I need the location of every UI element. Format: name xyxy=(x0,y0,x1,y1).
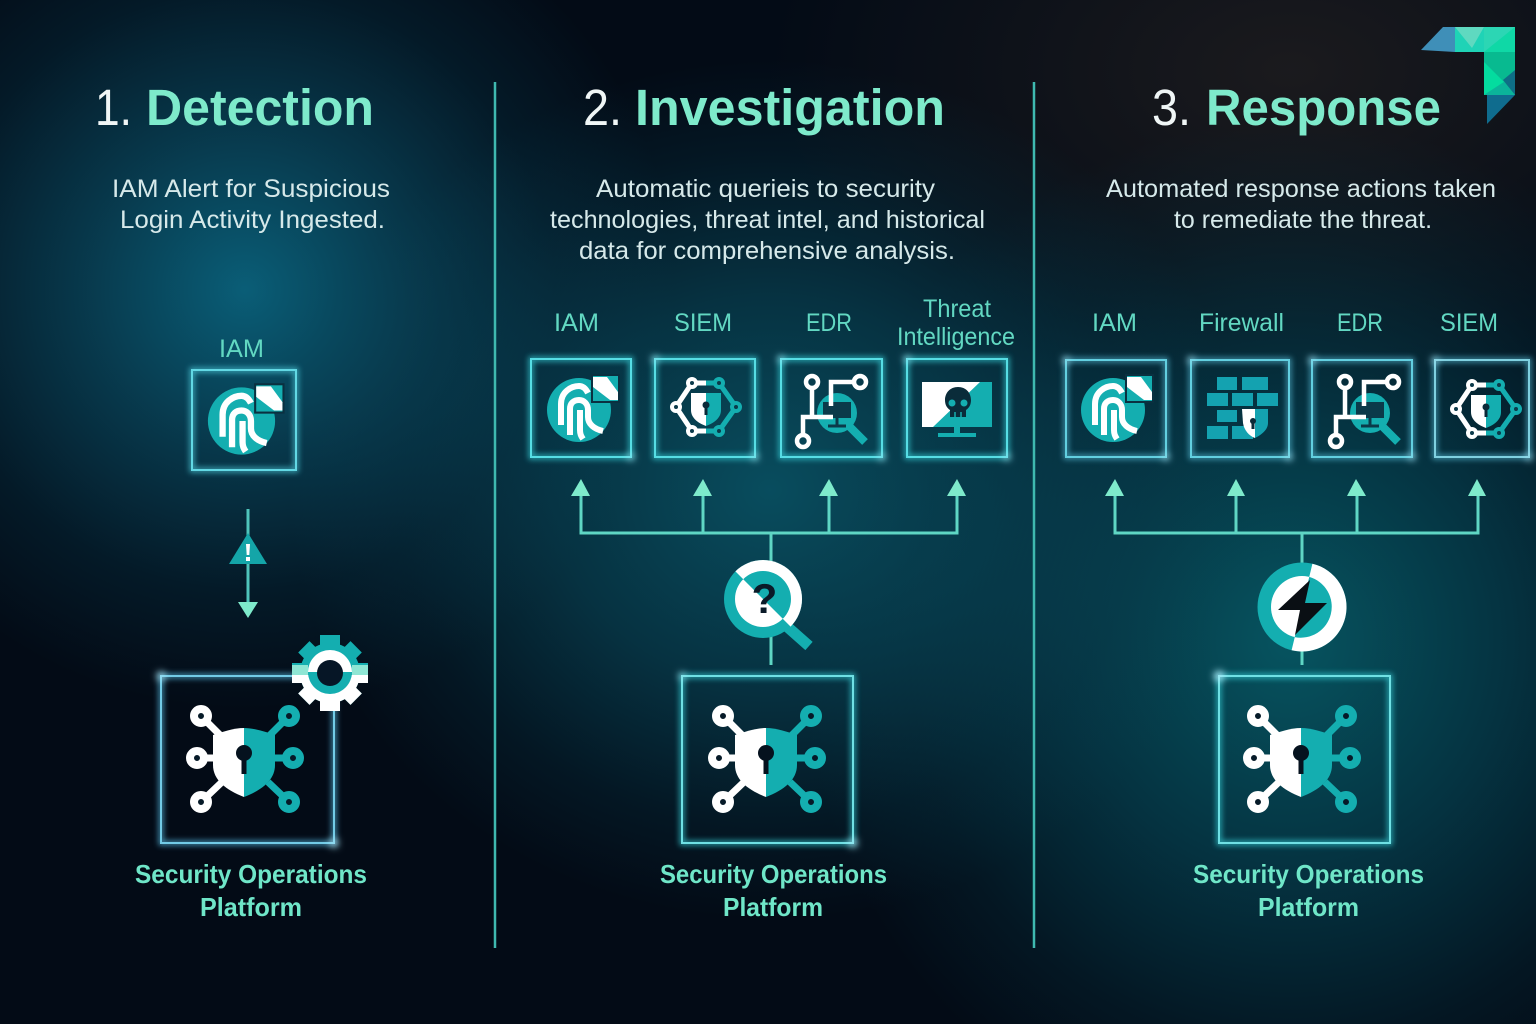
text block: detection description xyxy=(112,175,390,234)
icon box: security operations platform xyxy=(679,673,857,847)
icon box: SIEM xyxy=(652,356,758,460)
text block: investigation description: data for comprehensive analysis. xyxy=(579,237,955,265)
panel: detection xyxy=(95,79,390,922)
label: security operations platform: Security Operations xyxy=(1193,859,1424,889)
icon box: security operations platform xyxy=(157,672,338,847)
divider: detection and investigation xyxy=(494,82,496,948)
labels: response tools xyxy=(1092,309,1498,337)
heading: 3. Response: 3. xyxy=(1152,79,1191,136)
text block: response description: to remediate the threat. xyxy=(1174,206,1432,234)
label: security operations platform: Platform xyxy=(200,892,302,922)
icon: gear xyxy=(292,635,368,711)
labels: response tools: IAM xyxy=(1092,309,1137,337)
text block: investigation description xyxy=(550,175,985,265)
icon box: IAM xyxy=(531,359,634,460)
labels: response tools: Firewall xyxy=(1199,309,1284,337)
text block: detection description: IAM Alert for Suspicious xyxy=(112,175,390,203)
labels: investigation tools: Intelligence xyxy=(897,323,1015,351)
arrow: alert flowing down to platform xyxy=(229,509,267,618)
heading: 1. Detection: Detection xyxy=(146,79,374,136)
arrows: branching to tools xyxy=(571,479,966,665)
labels: investigation tools: SIEM xyxy=(674,309,732,337)
label: security operations platform: Platform xyxy=(723,892,823,922)
arrows: branching to tools xyxy=(1105,479,1486,665)
text block: response description xyxy=(1106,175,1496,234)
labels: investigation tools: EDR xyxy=(806,309,852,337)
logo xyxy=(1421,27,1515,124)
text block: response description: Automated response actions taken xyxy=(1106,175,1496,203)
labels: investigation tools: Threat xyxy=(923,295,991,323)
icon box: SIEM xyxy=(1432,357,1532,460)
text block: investigation description: Automatic querieis to security xyxy=(596,175,936,203)
labels: response tools: SIEM xyxy=(1440,309,1498,337)
icon box: IAM fingerprint xyxy=(192,370,296,470)
label: security operations platform xyxy=(135,859,367,922)
icon box: IAM xyxy=(1063,357,1169,460)
heading: 2. Investigation: 2. xyxy=(583,79,622,136)
panel: response xyxy=(1063,79,1532,922)
icon: lightning bolt xyxy=(1258,562,1347,652)
labels: investigation tools xyxy=(554,295,1015,351)
heading: 3. Response: Response xyxy=(1206,79,1441,136)
text block: detection description: Login Activity Ingested. xyxy=(120,206,385,234)
label: security operations platform xyxy=(1193,859,1424,922)
heading: 1. Detection: 1. xyxy=(95,79,132,136)
divider: investigation and response xyxy=(1033,82,1035,948)
icon: magnifier with question mark: ? xyxy=(752,575,777,622)
labels: investigation tools: IAM xyxy=(554,309,599,337)
icon box: security operations platform xyxy=(1214,671,1390,843)
icon box: threat intelligence xyxy=(904,356,1010,460)
labels: response tools: EDR xyxy=(1337,309,1383,337)
label: security operations platform: Platform xyxy=(1258,892,1359,922)
text block: investigation description: technologies, threat intel, and historical xyxy=(550,206,985,234)
icon: magnifier with question mark xyxy=(724,560,809,646)
label: security operations platform: Security Operations xyxy=(660,859,887,889)
label: IAM: IAM xyxy=(219,335,264,363)
label: security operations platform xyxy=(660,859,887,922)
label: security operations platform: Security Operations xyxy=(135,859,367,889)
panel: investigation xyxy=(531,79,1015,922)
icon box: EDR xyxy=(1309,357,1415,460)
heading: 2. Investigation: Investigation xyxy=(635,79,945,136)
icon box: firewall xyxy=(1188,357,1292,460)
icon box: EDR xyxy=(778,356,885,460)
